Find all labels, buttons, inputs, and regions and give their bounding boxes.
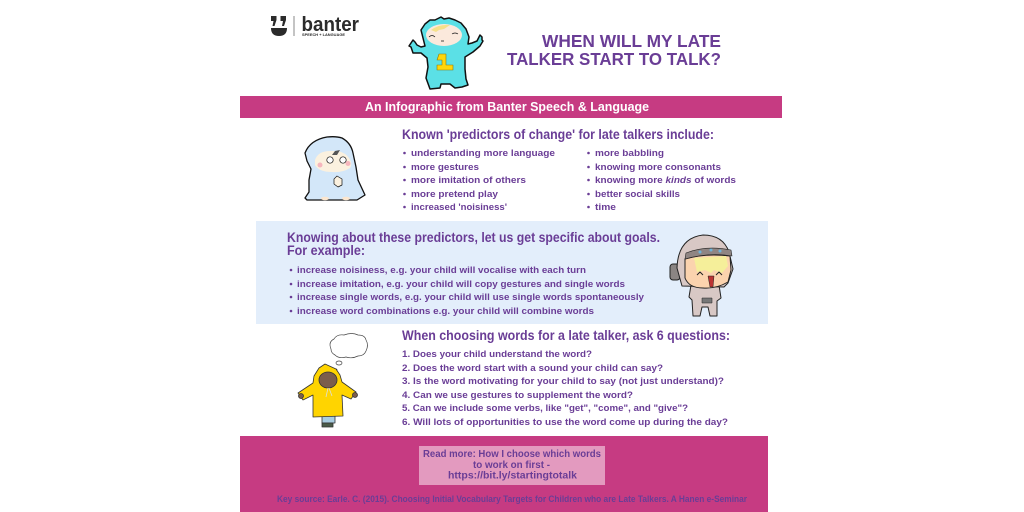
heading: predictors: Known 'predictors of change' for late talkers include: [402,127,714,142]
list: predictors right column [587,148,736,213]
list: predictors right column: time [595,202,616,213]
list: predictors left column: more gestures [411,162,479,173]
heading: goals: Knowing about these predictors, let us get specific about goals. [287,230,660,245]
logo: banter: banter [302,14,359,36]
list: goals: increase single words, e.g. your child will use single words spontaneously [297,292,645,303]
heading: goals [287,230,660,258]
logo: banter: SPEECH + LANGUAGE [302,33,346,37]
source citation: Key source: Earle. C. (2015). Choosing Initial Vocabulary Targets for Children who are Late Talkers. A Hanen e-Seminar [277,494,747,504]
list: six questions: 2. Does the word start with a sound your child can say? [402,363,663,374]
title: TALKER START TO TALK? [507,49,721,69]
list: goals: increase imitation, e.g. your child will copy gestures and single words [297,279,625,290]
list: six questions [402,349,728,428]
logo: banter [271,14,359,37]
list: predictors left column: understanding more language [411,148,555,159]
list: six questions: 5. Can we include some verbs, like "get", "come", and "give"? [402,403,688,414]
list: six questions: 4. Can we use gestures to supplement the word? [402,390,633,401]
list: predictors right column: knowing more consonants [595,162,721,173]
banner: An Infographic from Banter Speech & Language [365,100,649,114]
list: predictors left column: increased 'noisiness' [411,202,507,213]
icon: astronaut child [670,235,733,316]
list: goals: increase word combinations e.g. your child will combine words [297,306,594,317]
banner [240,96,782,118]
list: six questions: 3. Is the word motivating for your child to say (not just understand)? [402,376,724,387]
panel: goals [256,221,768,324]
callout: read more [419,446,605,485]
list: six questions: 6. Will lots of opportunities to use the word come up during the day? [402,417,728,428]
callout: read more: https://bit.ly/startingtotalk [448,470,577,482]
heading: goals: For example: [287,243,365,258]
icon: thought bubble [330,334,368,371]
list: predictors left column: more imitation of others [411,175,526,186]
list: predictors left column [403,148,555,213]
panel: predictors of change [402,127,736,213]
icon: person in yellow raincoat [298,364,358,427]
list: predictors right column: knowing more kinds of words [595,175,736,186]
list: six questions: 1. Does your child understand the word? [402,349,592,360]
heading: six questions: When choosing words for a late talker, ask 6 questions: [402,328,730,343]
icon: child in blue monster costume [409,17,483,89]
icon: baby wrapped in blue blanket [305,137,365,200]
list: goals: increase noisiness, e.g. your child will vocalise with each turn [297,265,586,276]
list: predictors right column: better social skills [595,189,680,200]
callout: read more: Read more: How I choose which words [423,449,601,460]
title: WHEN WILL MY LATE [542,31,721,51]
callout: read more: to work on first - [473,460,550,471]
footer panel [240,436,768,512]
panel: six questions [402,328,730,428]
title [507,31,721,69]
list: predictors left column: more pretend play [411,189,499,200]
list: goals [290,265,645,317]
list: predictors right column: more babbling [595,148,664,159]
